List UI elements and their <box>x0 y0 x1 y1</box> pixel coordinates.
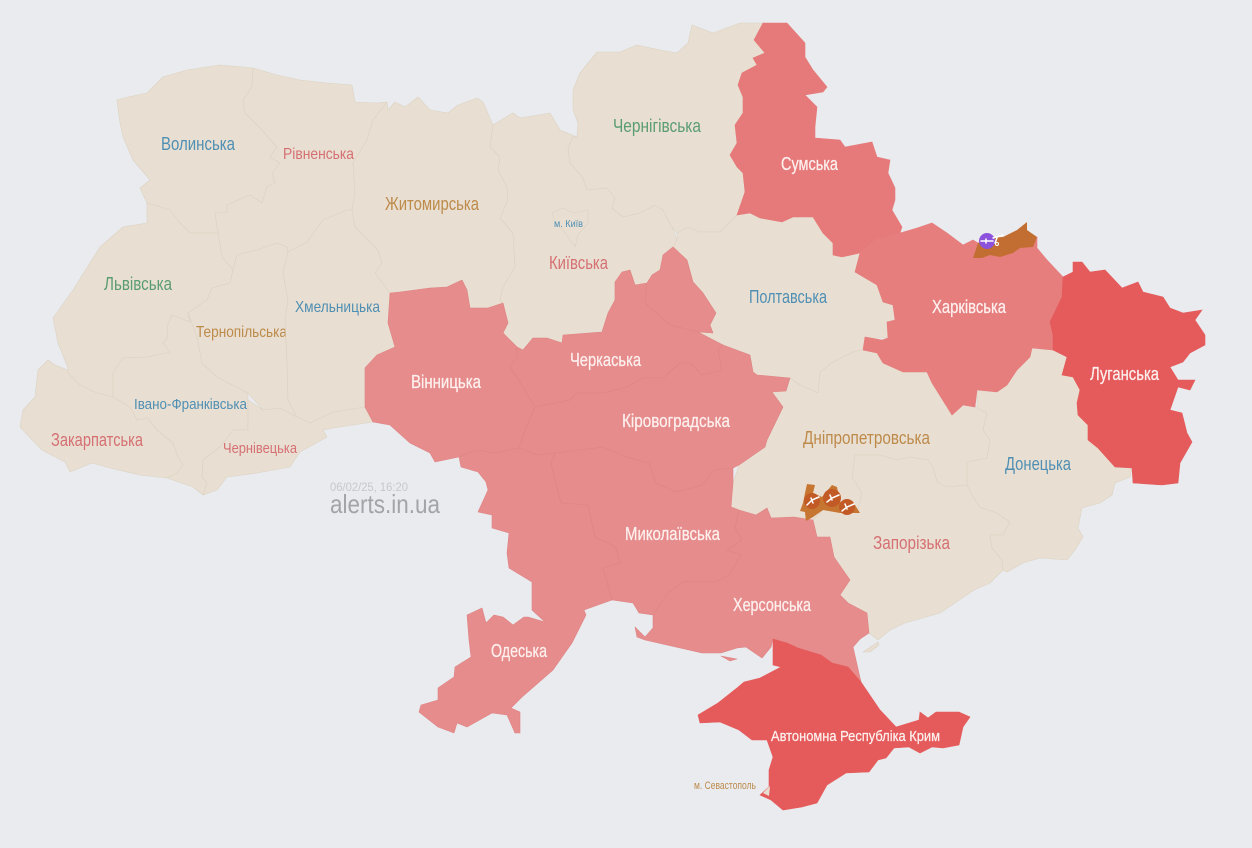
oblast: Chernivtsi: Чернівецька <box>223 440 298 457</box>
oblast: Kherson <box>635 508 869 682</box>
oblast: Zakarpattia <box>20 360 183 478</box>
Autonomous Republic of Crimea <box>698 639 970 810</box>
oblast: Sumy <box>730 23 902 257</box>
oblast: Ivano-Frankivsk <box>113 313 248 495</box>
oblast: Rivne: Рівненська <box>283 146 354 163</box>
oblast: Volyn <box>117 65 280 233</box>
oblast: Zakarpattia: Закарпатська <box>51 429 144 450</box>
oblast: Cherkasy: Черкаська <box>570 349 642 370</box>
oblast: Kyiv <box>490 113 677 350</box>
oblast: Khmelnytskyi <box>283 210 395 423</box>
oblast: Khmelnytskyi: Хмельницька <box>295 299 380 316</box>
oblast: Vinnytsia: Вінницька <box>411 371 482 392</box>
marker: south Dnipropetrovsk shelling zone with icons <box>800 484 860 521</box>
oblast: Kirovohrad: Кіровоградська <box>622 410 731 431</box>
oblast: Zhytomyr: Житомирська <box>385 193 480 214</box>
city: Kyiv <box>552 208 588 247</box>
oblast: Mykolaiv <box>551 447 742 615</box>
oblast: Donetsk <box>967 348 1132 572</box>
oblast: Sumy: Сумська <box>781 153 839 174</box>
oblast: Dnipropetrovsk: Дніпропетровська <box>803 427 931 448</box>
oblast: Poltava <box>673 213 895 393</box>
oblast: Lviv <box>53 203 233 397</box>
oblast: Dnipropetrovsk <box>731 350 990 520</box>
oblast: Mykolaiv: Миколаївська <box>625 523 721 544</box>
oblast: Poltava: Полтавська <box>749 286 828 307</box>
oblast: Donetsk: Донецька <box>1005 453 1072 474</box>
oblast: Ternopil <box>188 243 297 417</box>
city: Kyiv: м. Київ <box>554 218 583 230</box>
timestamp: 06/02/25, 16:20 <box>330 480 408 494</box>
oblast: Chernivtsi <box>202 400 373 495</box>
Autonomous Republic of Crimea: Автономна Республіка Крим <box>771 728 940 745</box>
oblast: Zaporizhzhia <box>813 455 1010 652</box>
oblast: Odesa: Одеська <box>491 640 548 661</box>
oblast: Luhansk: Луганська <box>1090 363 1160 384</box>
oblast: Kirovohrad <box>519 345 790 492</box>
oblast: Zaporizhzhia: Запорізька <box>873 532 951 553</box>
watermark: alerts.in.ua <box>330 489 440 519</box>
oblast: Cherkasy <box>510 247 723 407</box>
oblast: Ivano-Frankivsk: Івано-Франківська <box>134 396 248 413</box>
oblast: Kharkiv: Харківська <box>932 296 1007 317</box>
oblast: Rivne <box>215 68 387 270</box>
marker: north-east Kharkiv shelling zone with icons <box>973 222 1037 258</box>
oblast: Kharkiv <box>855 223 1063 415</box>
oblast: Volyn: Волинська <box>161 133 236 154</box>
oblast: Kherson: Херсонська <box>733 594 812 615</box>
oblast: Chernihiv: Чернігівська <box>613 115 702 136</box>
oblast: Zhytomyr <box>352 97 515 308</box>
oblast: Ternopil: Тернопільська <box>196 324 287 341</box>
oblast: Luhansk <box>1050 262 1205 485</box>
oblast: Lviv: Львівська <box>104 273 173 294</box>
oblast: Vinnytsia <box>365 280 535 462</box>
label: Sevastopol: м. Севастополь <box>694 780 756 792</box>
oblast: Kyiv: Київська <box>549 252 609 273</box>
oblast: Chernihiv <box>568 23 765 233</box>
oblast: Odesa <box>419 448 620 733</box>
